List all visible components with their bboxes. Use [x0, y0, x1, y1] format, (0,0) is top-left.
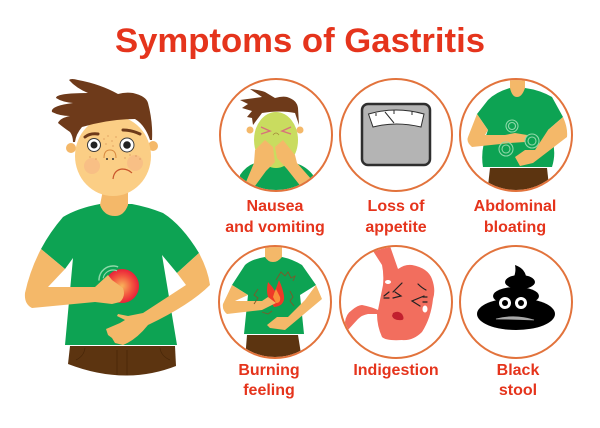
- nose: [104, 150, 116, 160]
- main figure: boy with stomach pain: [25, 79, 210, 376]
- label: burning feeling: feeling: [243, 382, 295, 399]
- label: loss of appetite: Loss of: [368, 198, 424, 215]
- label: abdominal bloating: bloating: [484, 219, 546, 236]
- label: black stool: stool: [499, 382, 537, 399]
- label: black stool: Black: [497, 362, 539, 379]
- panel: burning feeling: [219, 240, 331, 360]
- ears: [66, 141, 158, 153]
- icon: black stool: [477, 265, 555, 330]
- label: burning feeling: Burning: [238, 362, 300, 379]
- pain spot: [98, 265, 139, 303]
- neck: [100, 190, 128, 216]
- panel: indigestion: [340, 246, 452, 358]
- panel: abdominal bloating: [460, 70, 572, 195]
- eyes: [88, 138, 134, 152]
- label: indigestion: Indigestion: [353, 362, 439, 379]
- mouth: [113, 169, 132, 179]
- icon: stomach: [345, 246, 434, 340]
- hair: [52, 79, 152, 142]
- icon: flame: [267, 280, 284, 307]
- freckles: [89, 135, 141, 160]
- ring: [220, 79, 332, 191]
- title: Symptoms of Gastritis: [115, 22, 485, 60]
- face: [75, 116, 151, 196]
- panel: nausea and vomiting: [220, 79, 332, 195]
- right arm and hand: [106, 253, 210, 345]
- eyebrows: [85, 130, 140, 137]
- pants: [68, 346, 176, 376]
- shirt: [41, 204, 199, 345]
- panel: loss of appetite: [340, 79, 452, 191]
- left arm and hand: [25, 249, 124, 308]
- label: nausea and vomiting: and vomiting: [225, 219, 325, 236]
- label: abdominal bloating: Abdominal: [474, 198, 556, 215]
- panel: black stool: [460, 246, 572, 358]
- icon: bathroom scale: [362, 104, 430, 165]
- label: loss of appetite: appetite: [365, 219, 427, 236]
- cheeks: [84, 155, 143, 174]
- label: nausea and vomiting: Nausea: [247, 198, 303, 215]
